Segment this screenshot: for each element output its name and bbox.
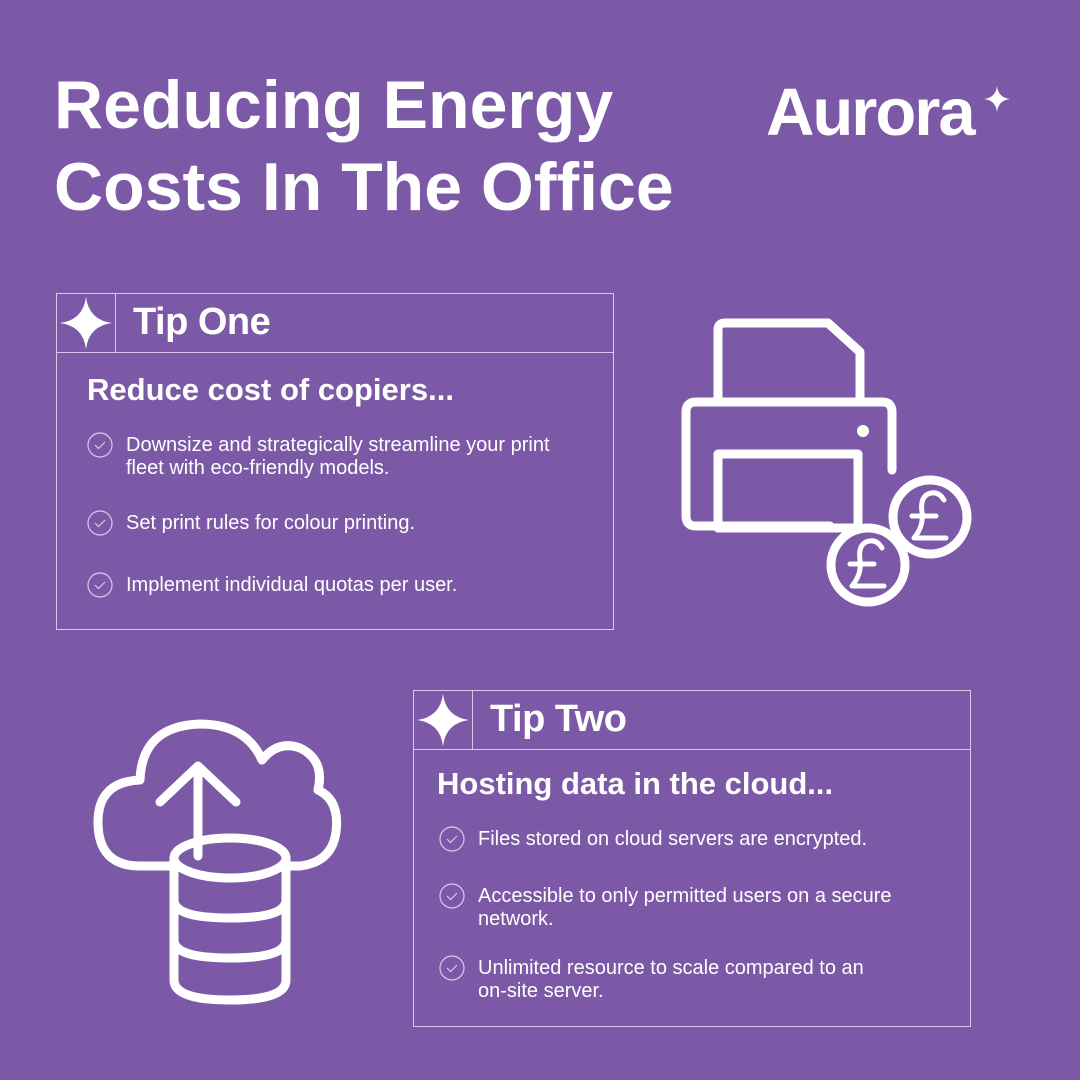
item 3: Implement individual quotas per user. bbox=[126, 574, 457, 596]
icon: cloud upload with database bbox=[94, 720, 342, 1004]
subheading: Reduce cost of copiers... bbox=[87, 372, 454, 407]
item 2: Accessible to only permitted users on a secure bbox=[478, 885, 892, 907]
item 1: Downsize and strategically streamline your print bbox=[126, 434, 550, 456]
subheading: Hosting data in the cloud... bbox=[437, 766, 833, 801]
heading: Tip One bbox=[133, 301, 270, 343]
item 2: network. bbox=[478, 908, 554, 930]
title: Costs In The Office bbox=[54, 149, 674, 225]
item 1 bbox=[87, 432, 550, 479]
title bbox=[54, 67, 674, 225]
heading: Tip Two bbox=[490, 698, 627, 740]
title: Reducing Energy bbox=[54, 67, 613, 143]
logo: Aurora bbox=[766, 75, 974, 150]
icon: star bbox=[57, 294, 116, 352]
item 2: Set print rules for colour printing. bbox=[126, 512, 415, 534]
panel: tip two bbox=[413, 690, 971, 1027]
item 3: on-site server. bbox=[478, 980, 604, 1002]
icon: printer with pound coins bbox=[682, 318, 972, 606]
item 1: fleet with eco-friendly models. bbox=[126, 457, 389, 479]
item 1: Files stored on cloud servers are encrypted. bbox=[478, 828, 867, 850]
icon: star bbox=[414, 691, 473, 749]
item 3 bbox=[439, 955, 864, 1002]
tip two header bbox=[414, 691, 970, 750]
item 3: Unlimited resource to scale compared to an bbox=[478, 957, 864, 979]
item 2 bbox=[439, 883, 892, 930]
panel: tip one bbox=[56, 293, 614, 630]
tip one header bbox=[57, 294, 613, 353]
